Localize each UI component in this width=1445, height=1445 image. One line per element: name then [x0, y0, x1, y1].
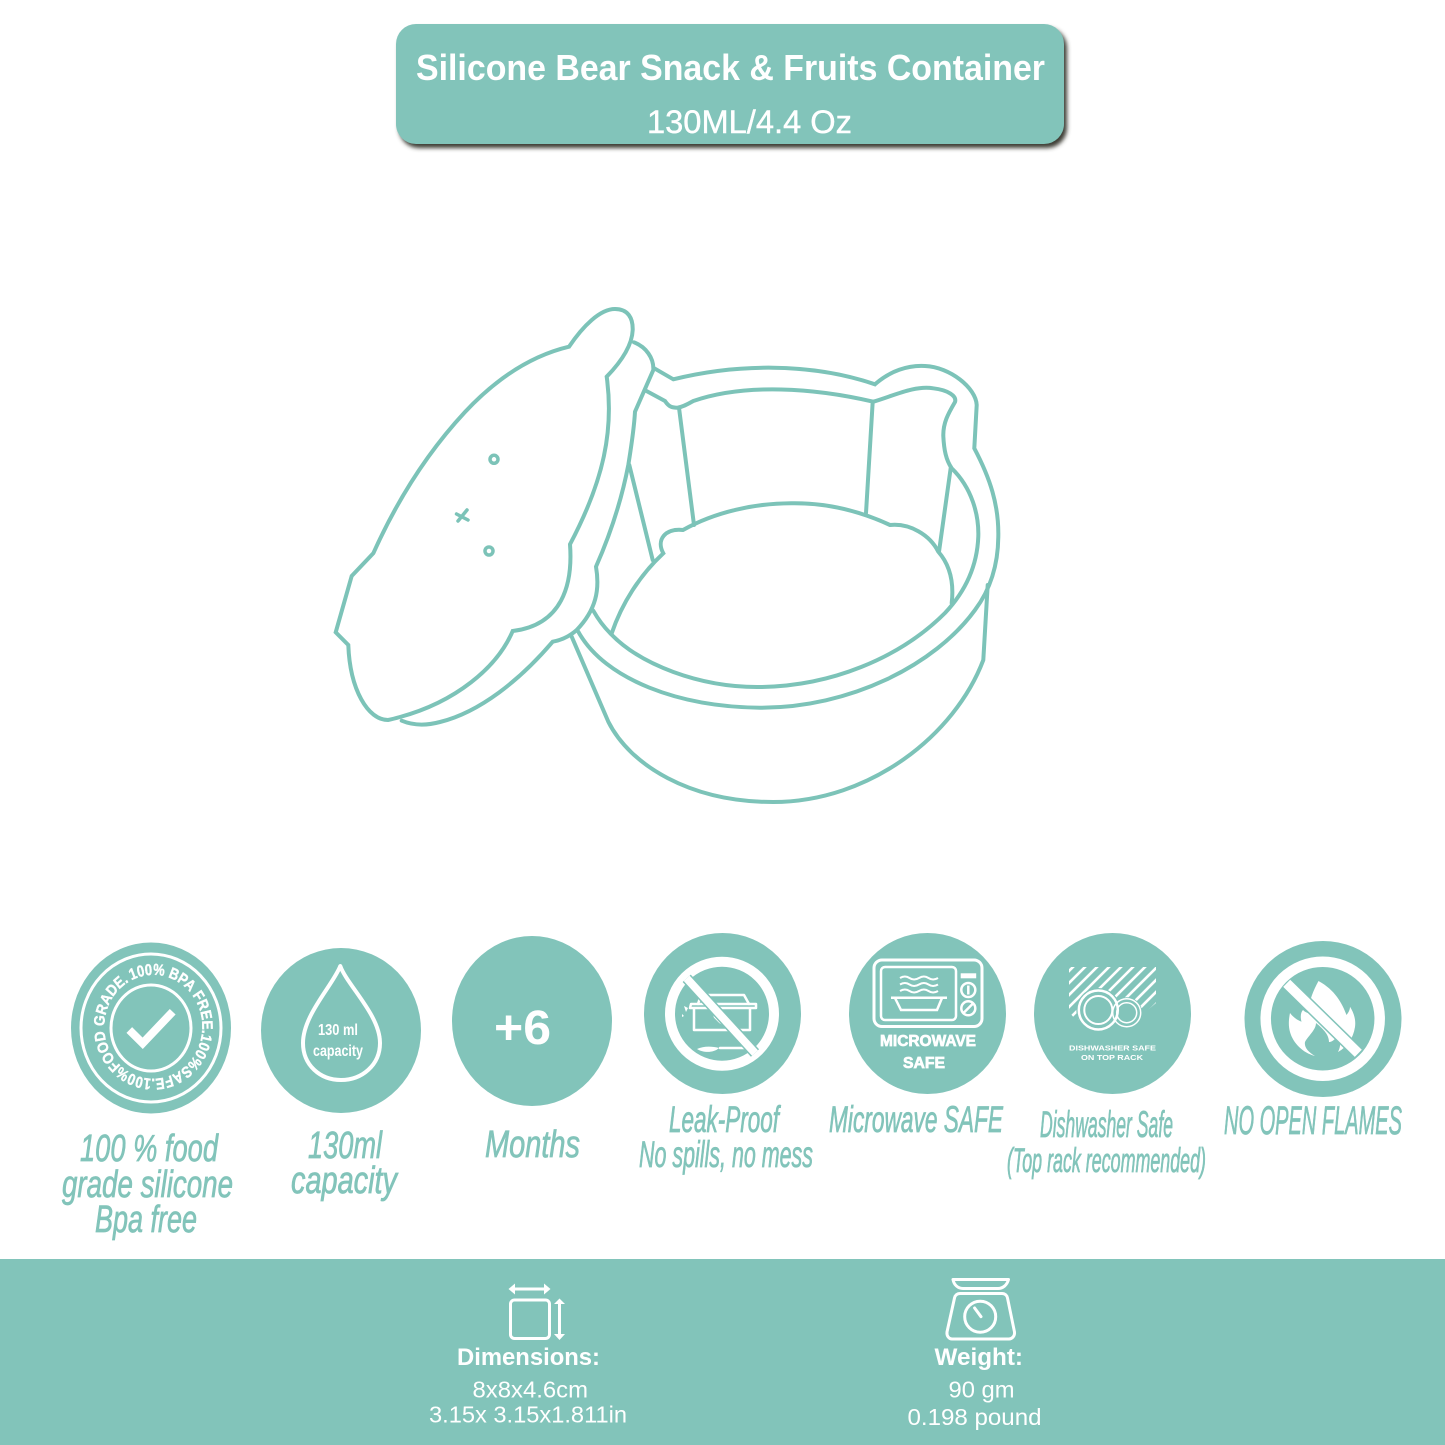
age circle icon [452, 936, 612, 1106]
badge icon: 100% BPA FREE.100%SAFE.100%FOOD GRADE. [94, 964, 213, 1090]
label: leak proof: No spills, no mess [639, 1134, 813, 1175]
label: microwave safe: Microwave SAFE [829, 1099, 1004, 1140]
weight spec: Weight: [934, 1344, 1023, 1371]
icon: dimensions [508, 1284, 565, 1340]
dishwasher icon: ON TOP RACK [1081, 1053, 1144, 1062]
feature: age [452, 936, 612, 1166]
leak proof icon [644, 933, 801, 1094]
label: food grade [62, 1128, 233, 1241]
dishwasher icon [1034, 933, 1198, 1094]
bottom specs band [0, 1259, 1445, 1445]
dimensions spec: 8x8x4.6cm [472, 1376, 588, 1402]
container lid [336, 309, 653, 725]
label: leak proof: Leak-Proof [669, 1099, 781, 1140]
label: capacity [291, 1125, 399, 1202]
age circle icon: +6 [494, 1002, 551, 1055]
container base [572, 366, 998, 802]
label: dishwasher safe [1007, 1104, 1206, 1180]
label: dishwasher safe: (Top rack recommended) [1007, 1142, 1206, 1180]
label: leak proof [639, 1099, 813, 1175]
microwave icon: SAFE [903, 1055, 945, 1072]
feature: microwave safe [829, 933, 1006, 1140]
microwave icon: MICROWAVE [880, 1033, 976, 1050]
title banner: Silicone Bear Snack & Fruits Container [416, 47, 1045, 88]
label: food grade: 100 % food [80, 1128, 219, 1170]
badge icon [71, 942, 231, 1114]
title banner [396, 24, 1067, 148]
feature: capacity [261, 948, 421, 1202]
weight spec: 0.198 pound [908, 1404, 1042, 1430]
label: food grade: Bpa free [95, 1199, 197, 1241]
dimensions spec [429, 1284, 627, 1428]
product line drawing: bear snack container [336, 309, 998, 802]
label: capacity: 130ml [308, 1125, 383, 1167]
label: dishwasher safe: Dishwasher Safe [1040, 1104, 1173, 1145]
label: food grade: grade silicone [62, 1164, 233, 1206]
no flames icon [1244, 941, 1402, 1097]
feature: food grade badge [62, 942, 233, 1241]
capacity drop icon: capacity [313, 1043, 363, 1060]
icon: kitchen scale [947, 1280, 1015, 1339]
dishwasher icon: DISHWASHER SAFE [1069, 1044, 1156, 1052]
label: months: Months [485, 1124, 580, 1166]
capacity drop icon [261, 948, 421, 1113]
food insert [612, 503, 952, 633]
feature: no open flames [1224, 941, 1402, 1143]
dimensions spec: 3.15x 3.15x1.811in [429, 1402, 627, 1428]
weight spec [908, 1280, 1042, 1430]
weight spec: 90 gm [948, 1376, 1014, 1402]
dimensions spec: Dimensions: [457, 1344, 600, 1371]
capacity drop icon: 130 ml [318, 1022, 358, 1039]
microwave icon [849, 933, 1006, 1094]
feature: dishwasher safe [1007, 933, 1206, 1180]
title banner: 130ML/4.4 Oz [647, 104, 852, 140]
feature: leak proof [639, 933, 813, 1175]
label: capacity: capacity [291, 1160, 399, 1202]
